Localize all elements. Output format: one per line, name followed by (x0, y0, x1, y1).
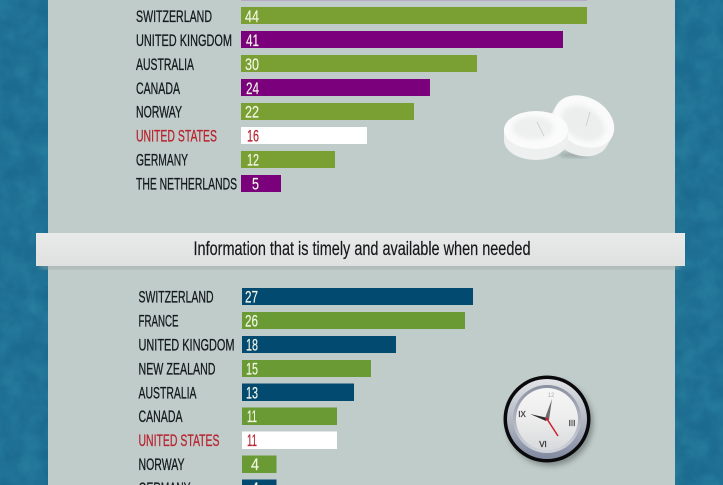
row: Norway (138, 455, 276, 474)
row: France: 26 (245, 312, 258, 330)
row: United States (136, 126, 367, 146)
icon: pills (504, 85, 624, 167)
row: Germany: GERMANY (136, 150, 188, 170)
row: New Zealand: 15 (246, 360, 258, 378)
row: Australia (138, 384, 354, 402)
row: Canada (136, 79, 430, 98)
row: Canada: CANADA (136, 79, 180, 98)
row: Canada: CANADA (138, 407, 183, 426)
top bar fragment (241, 0, 587, 1)
row: Australia: AUSTRALIA (138, 384, 197, 402)
row: United Kingdom (138, 336, 396, 354)
row: United States: 11 (247, 431, 257, 450)
row: United States: UNITED STATES (138, 431, 220, 450)
row: Switzerland: SWITZERLAND (138, 288, 214, 306)
panel: information chart (138, 288, 473, 485)
row: United States (138, 431, 337, 450)
row: Canada: 24 (246, 79, 259, 98)
row: Canada (138, 407, 337, 426)
row: Australia: 13 (246, 384, 258, 402)
icon: clock (504, 376, 593, 466)
row: United Kingdom (136, 31, 563, 50)
row: Switzerland (138, 288, 473, 306)
row: France: FRANCE (138, 312, 178, 330)
row: France (138, 312, 465, 330)
row: Norway: 22 (245, 102, 259, 122)
row: Australia: AUSTRALIA (136, 55, 194, 74)
row: Switzerland: SWITZERLAND (136, 7, 212, 26)
row: New Zealand (138, 360, 371, 378)
panel: medicines chart (136, 0, 587, 194)
row: The Netherlands: THE NETHERLANDS (136, 174, 237, 194)
row: Australia (136, 55, 477, 74)
row: Norway: NORWAY (136, 102, 182, 122)
row: The Netherlands: 5 (252, 174, 259, 194)
row: United States: UNITED STATES (136, 126, 217, 146)
icon: clock: 12 (548, 393, 555, 399)
icon: clock: IX (518, 410, 526, 419)
row: Canada: 11 (247, 407, 257, 426)
row: United Kingdom: UNITED KINGDOM (138, 336, 234, 354)
row: Switzerland: 44 (245, 7, 259, 26)
row: Germany (138, 479, 276, 485)
row: Germany: 12 (247, 150, 259, 170)
banner: section heading: Information that is timely and available when needed (194, 239, 530, 260)
row: United States: 16 (247, 126, 259, 146)
row: United Kingdom: 41 (246, 31, 259, 50)
row: Australia: 30 (245, 55, 259, 74)
row: United Kingdom: UNITED KINGDOM (136, 31, 232, 50)
row: Switzerland (136, 7, 587, 26)
row: New Zealand: NEW ZEALAND (138, 360, 216, 378)
row: Norway (136, 102, 414, 122)
row: Norway: NORWAY (138, 455, 184, 474)
icon: clock: III (569, 419, 575, 428)
banner shadow (40, 263, 680, 269)
banner: section heading (36, 233, 685, 266)
row: Norway: 4 (251, 455, 259, 474)
row: United Kingdom: 18 (246, 336, 258, 354)
row: Germany (136, 150, 335, 170)
row: Switzerland: 27 (245, 288, 258, 306)
icon: clock: VI (539, 440, 547, 449)
